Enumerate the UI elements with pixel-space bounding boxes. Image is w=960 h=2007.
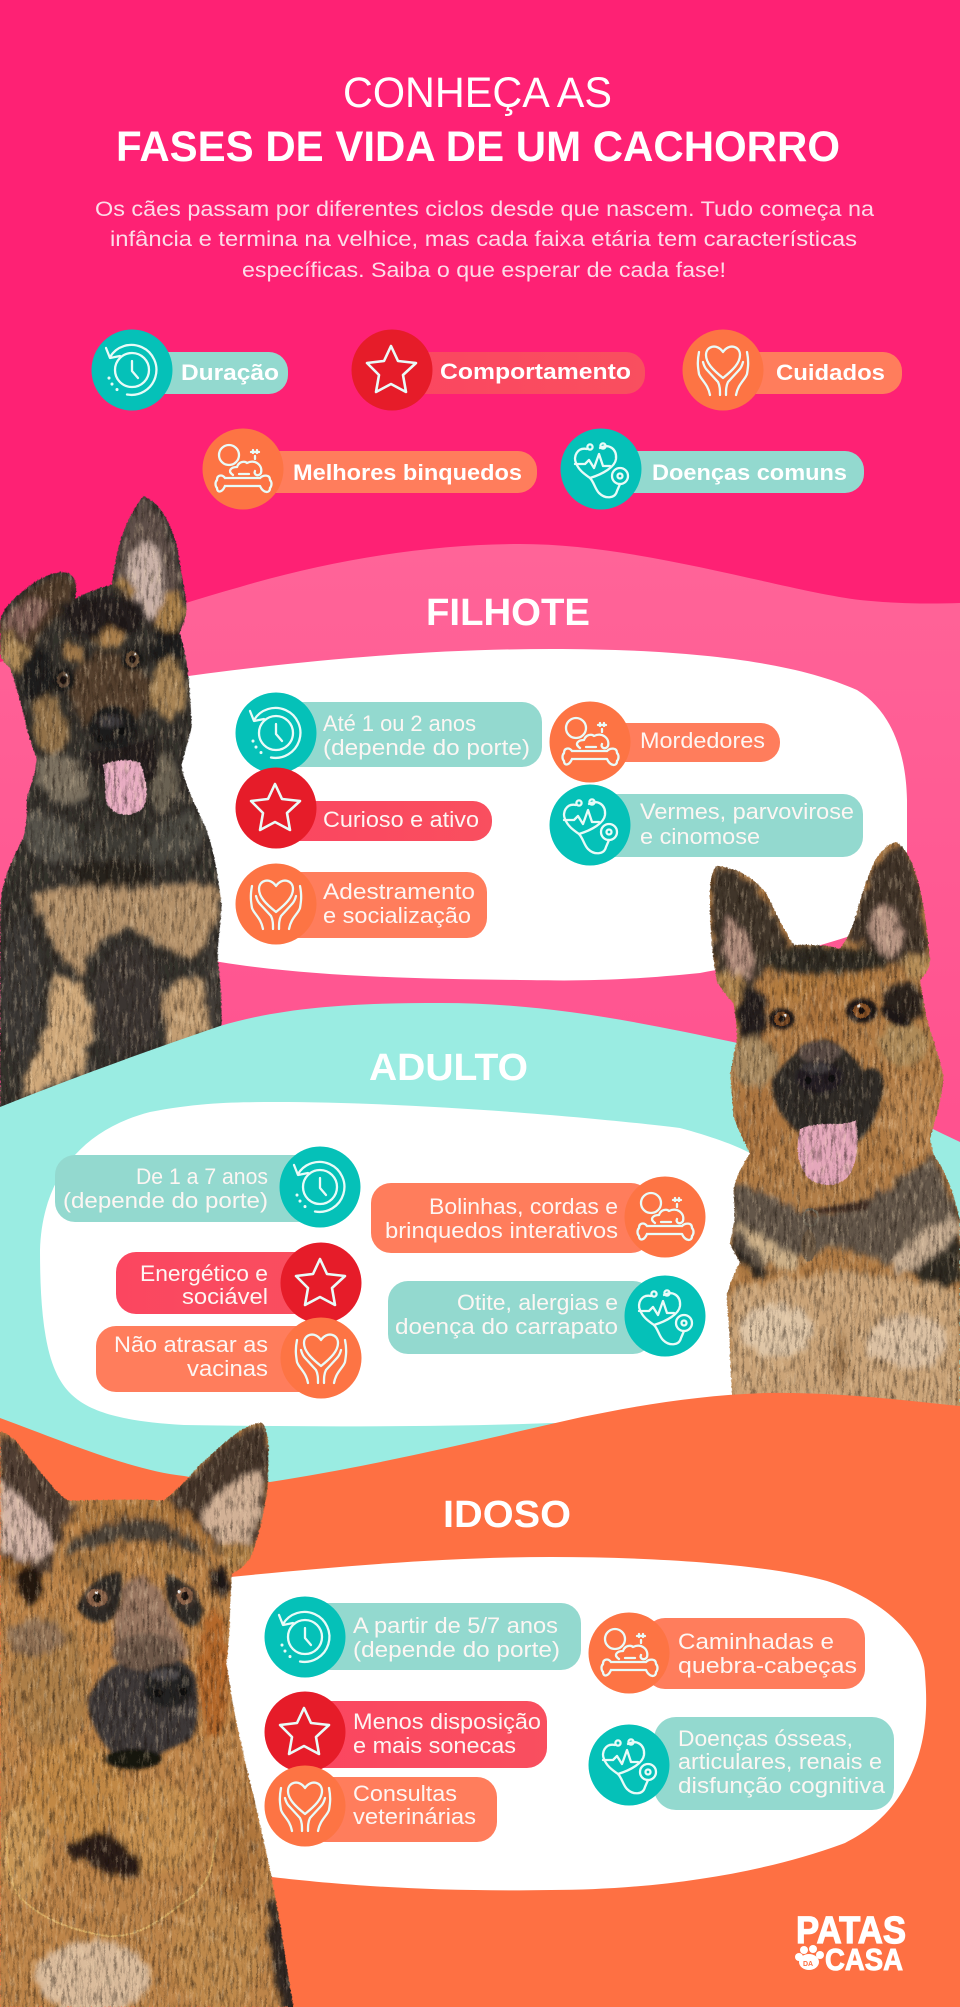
idoso: duração: A partir de 5/7 anos <box>353 1613 558 1638</box>
adulto: doenças <box>388 1276 706 1356</box>
legend: doenças comuns <box>560 428 864 510</box>
idoso: brinquedos <box>588 1612 865 1694</box>
filhote: comportamento <box>236 768 492 848</box>
wave: idoso section <box>0 1393 960 2007</box>
logo: patas da casa <box>795 1910 906 1977</box>
filhote: cuidados: Adestramento <box>323 879 475 904</box>
legend: comportamento <box>352 330 645 410</box>
adulto: cuidados: Não atrasar as <box>114 1332 268 1357</box>
idoso: doenças: articulares, renais e <box>678 1749 882 1774</box>
filhote: comportamento: Curioso e ativo <box>323 807 479 832</box>
legend <box>92 330 902 510</box>
filhote: doenças <box>550 784 863 866</box>
adulto: doenças: doença do carrapato <box>395 1314 618 1339</box>
idoso: comportamento: e mais sonecas <box>353 1733 516 1758</box>
adulto items <box>55 1146 706 1398</box>
idoso: doenças <box>588 1717 894 1810</box>
idoso items <box>264 1596 894 1846</box>
intro paragraph: infância e termina na velhice, mas cada faixa etária tem características <box>110 227 857 251</box>
legend: cuidados: Cuidados <box>776 360 885 385</box>
photo: senior dog <box>0 1420 305 2007</box>
filhote: duração <box>236 692 542 774</box>
adulto: comportamento <box>116 1242 362 1324</box>
panel: idoso white blob <box>200 1557 926 1890</box>
legend: melhores brinquedos: Melhores binquedos <box>293 460 522 485</box>
adulto: brinquedos: Bolinhas, cordas e <box>429 1194 618 1219</box>
adulto: duração: (depende do porte) <box>63 1188 268 1213</box>
idoso: cuidados <box>264 1766 497 1846</box>
legend: cuidados <box>682 330 902 410</box>
photo: puppy <box>0 490 243 1110</box>
icon: paw: DA <box>803 1961 813 1968</box>
adulto: cuidados <box>96 1318 362 1398</box>
idoso: cuidados: Consultas <box>353 1781 457 1806</box>
legend: duração: Duração <box>181 360 279 385</box>
legend: duração <box>92 330 288 410</box>
filhote: duração: (depende do porte) <box>323 735 530 760</box>
filhote: brinquedos: Mordedores <box>640 728 765 753</box>
idoso: duração: (depende do porte) <box>353 1637 560 1662</box>
idoso: doenças: disfunção cognitiva <box>678 1773 886 1798</box>
filhote items <box>236 692 863 944</box>
adulto: comportamento: Energético e <box>140 1261 268 1286</box>
title <box>116 69 840 171</box>
heading: idoso: IDOSO <box>443 1494 571 1536</box>
adulto: brinquedos: brinquedos interativos <box>385 1218 618 1243</box>
title: CONHEÇA AS <box>343 69 612 117</box>
intro paragraph: específicas. Saiba o que esperar de cada fase! <box>242 258 726 282</box>
heading: filhote: FILHOTE <box>426 592 590 634</box>
legend: comportamento: Comportamento <box>440 359 631 384</box>
filhote: cuidados <box>236 864 487 944</box>
filhote: duração: Até 1 ou 2 anos <box>323 711 476 736</box>
logo: patas da casa: CASA <box>825 1942 903 1977</box>
adulto: duração: De 1 a 7 anos <box>136 1164 268 1189</box>
idoso: comportamento <box>264 1692 547 1772</box>
adulto: cuidados: vacinas <box>187 1356 268 1381</box>
intro paragraph: Os cães passam por diferentes ciclos desde que nascem. Tudo começa na <box>95 197 874 221</box>
legend: melhores brinquedos <box>202 428 537 510</box>
heading: adulto: ADULTO <box>369 1047 528 1089</box>
adulto: brinquedos <box>371 1176 706 1258</box>
photo: adult dog <box>697 830 960 1420</box>
filhote: doenças: e cinomose <box>640 824 760 849</box>
panel: filhote white blob <box>140 649 907 980</box>
idoso: cuidados: veterinárias <box>353 1804 476 1829</box>
panel: adulto white blob <box>40 1102 810 1426</box>
idoso: comportamento: Menos disposição <box>353 1709 541 1734</box>
wave: adulto section <box>0 1003 960 1500</box>
intro paragraph <box>95 197 874 282</box>
adulto: doenças: Otite, alergias e <box>457 1290 618 1315</box>
idoso: brinquedos: quebra-cabeças <box>678 1653 857 1678</box>
filhote: doenças: Vermes, parvovirose <box>640 799 854 824</box>
idoso: brinquedos: Caminhadas e <box>678 1629 834 1654</box>
idoso: doenças: Doenças ósseas, <box>678 1726 853 1751</box>
legend: doenças comuns: Doenças comuns <box>652 460 847 485</box>
filhote: cuidados: e socialização <box>323 903 471 928</box>
title: FASES DE VIDA DE UM CACHORRO <box>116 123 840 171</box>
wave: filhote section <box>0 544 960 1250</box>
idoso: duração <box>264 1596 581 1678</box>
logo: patas da casa: PATAS <box>796 1910 906 1952</box>
adulto: comportamento: sociável <box>182 1284 268 1309</box>
adulto: duração <box>55 1146 360 1228</box>
filhote: brinquedos <box>550 702 780 782</box>
